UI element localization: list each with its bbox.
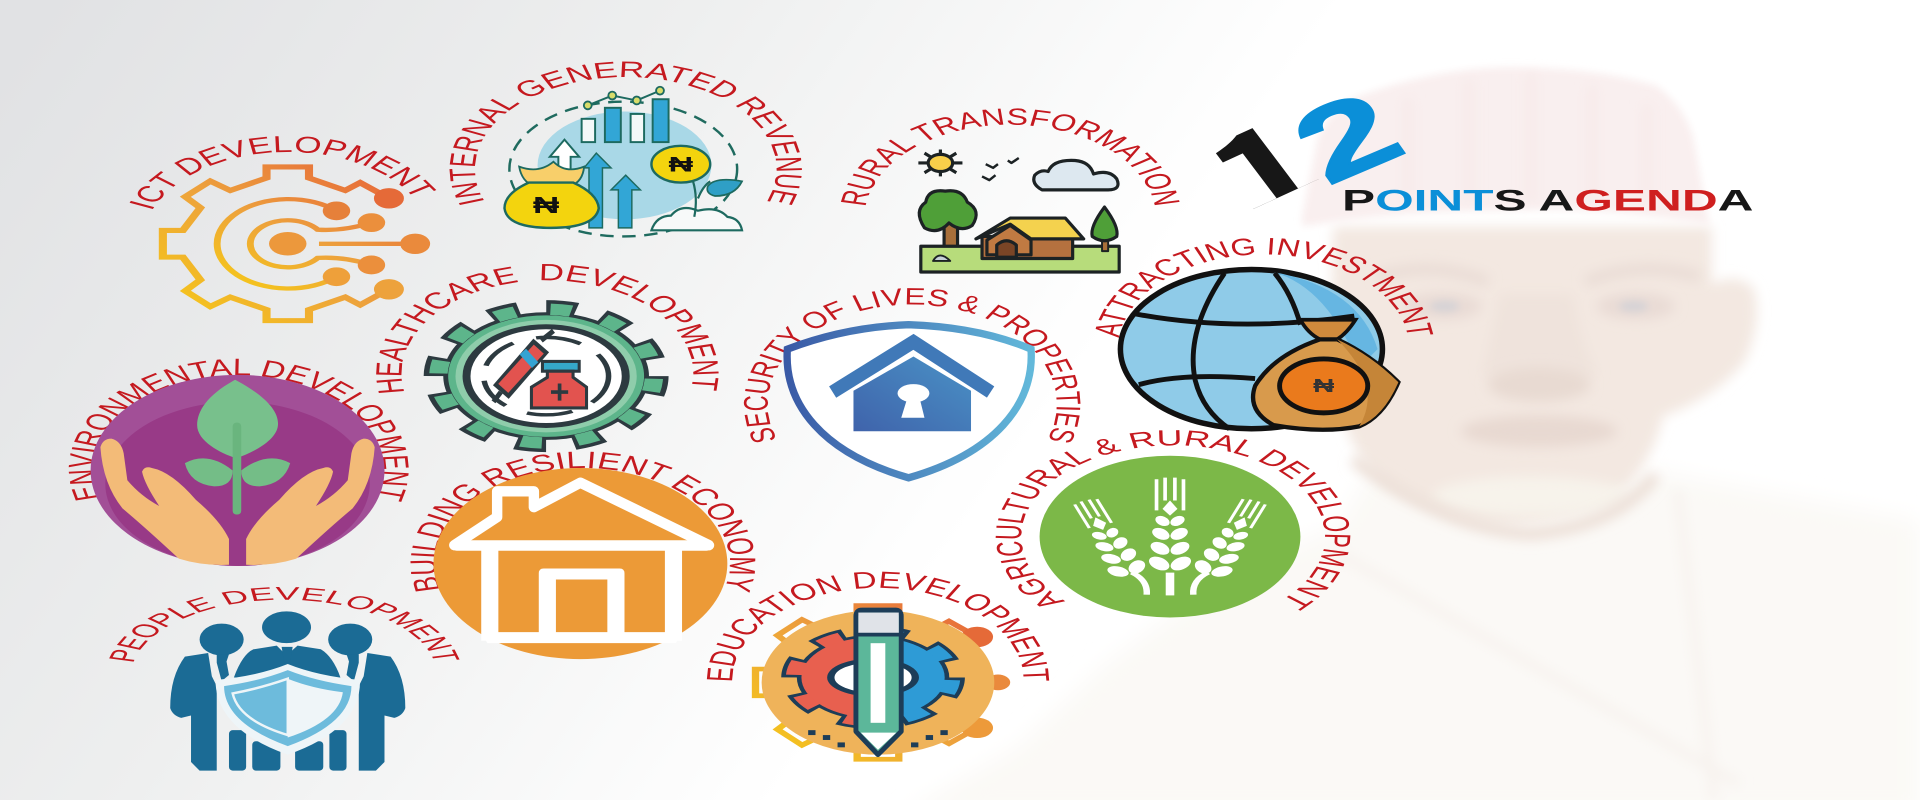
curved heading: PEOPLE DEVELOPMENT xyxy=(109,587,460,662)
icon: revenue chart and money bag xyxy=(504,87,742,236)
icon: wheat on green circle xyxy=(1040,456,1300,617)
curved heading: EDUCATION DEVELOPMENT xyxy=(706,572,1050,681)
curved heading: ENVIRONMENTAL DEVELOPMENT xyxy=(68,358,409,502)
panel: internal generated revenue xyxy=(450,62,802,238)
numeral one: 1 xyxy=(1162,70,1359,256)
panel: healthcare development xyxy=(376,264,719,452)
faded portrait xyxy=(900,67,1920,800)
icon: gear with syringe and vial xyxy=(438,309,654,443)
panel: ICT development xyxy=(130,136,436,324)
numeral two: 2 xyxy=(1270,69,1424,206)
curved heading: BUILDING RESILIENT ECONOMY xyxy=(410,452,756,593)
curved heading: RURAL TRANSFORMATION xyxy=(840,108,1180,206)
panel: security of lives and properties xyxy=(744,288,1080,482)
panel: rural transformation xyxy=(840,108,1180,274)
icon: house on orange circle xyxy=(433,468,727,659)
icon: revenue chart and money bag: ₦ xyxy=(668,153,694,177)
icon: globe with money bag: ₦ xyxy=(1313,376,1335,397)
panel: environmental development xyxy=(68,358,409,566)
panel: building resilient economy xyxy=(410,452,756,660)
icon: revenue chart and money bag: ₦ xyxy=(533,193,559,218)
curved heading: ATTRACTING INVESTMENT xyxy=(1096,238,1434,338)
icon: gear and pencil xyxy=(756,606,1010,759)
icon: hands holding plant xyxy=(91,375,384,566)
icon: circuit gear xyxy=(163,167,430,321)
curved heading: ICT DEVELOPMENT xyxy=(130,136,436,209)
curved heading: INTERNAL GENERATED REVENUE xyxy=(450,62,802,205)
icon: globe with money bag xyxy=(1120,270,1398,430)
panel: people development xyxy=(109,587,460,771)
curved heading: HEALTHCARE DEVELOPMENT xyxy=(376,264,719,393)
panel: education development xyxy=(706,572,1050,762)
panel: attracting investment xyxy=(1096,238,1434,432)
points agenda text: P OINT S A GEND A xyxy=(1342,185,1753,218)
icon: village scene xyxy=(918,149,1119,272)
curved heading: AGRICULTURAL & RURAL DEVELOPMENT xyxy=(996,430,1350,611)
icon: team with shield xyxy=(170,611,405,771)
title: 12 points agenda xyxy=(1216,98,1752,211)
icon: shield with house xyxy=(787,325,1031,478)
curved heading: SECURITY OF LIVES & PROPERTIES xyxy=(744,288,1080,442)
panel: agricultural and rural development xyxy=(996,430,1350,618)
